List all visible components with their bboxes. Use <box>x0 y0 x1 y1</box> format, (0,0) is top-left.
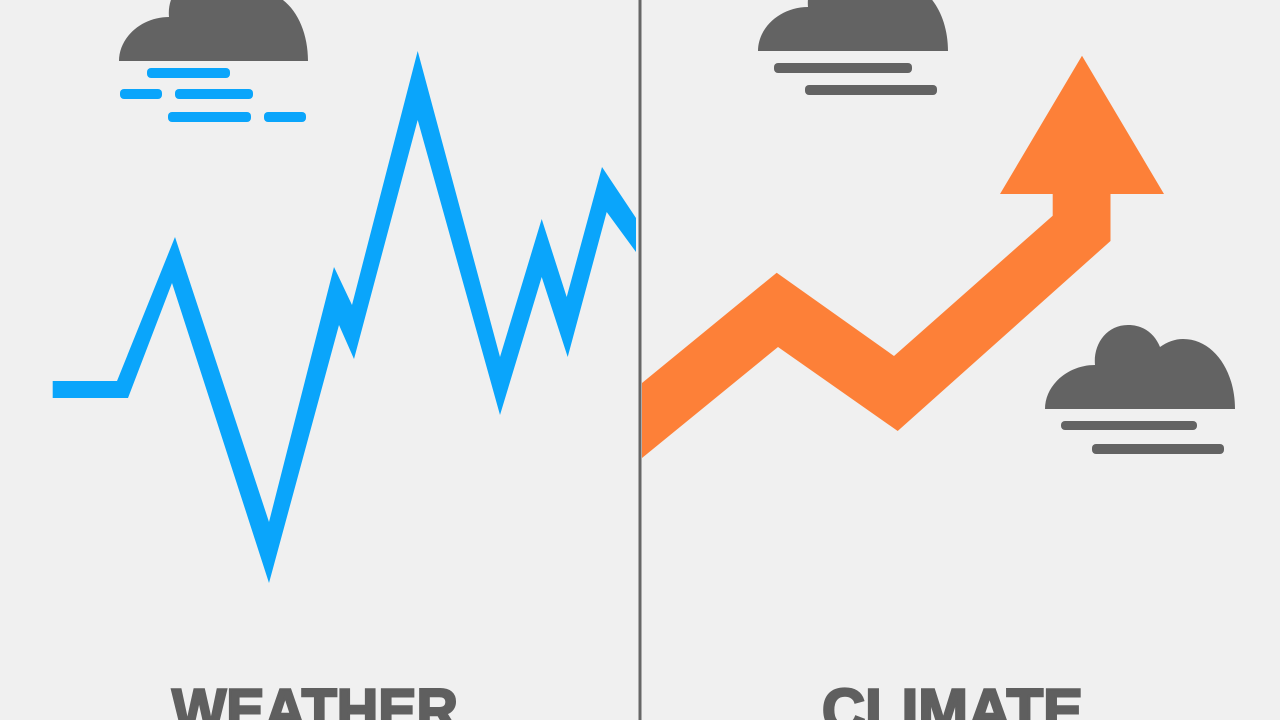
fog lines <box>774 63 937 95</box>
fog lines <box>120 68 306 122</box>
arrow: rising orange climate trend <box>642 56 1164 458</box>
cloud <box>119 0 308 61</box>
chart: jagged blue weather line <box>53 51 636 583</box>
icon: cloud with blue fog lines <box>119 0 308 122</box>
panel: climate <box>642 0 1235 720</box>
fog lines <box>1061 421 1224 454</box>
icon: cloud with grey fog lines, right <box>1045 325 1235 454</box>
center divider <box>638 0 642 720</box>
cloud <box>1045 325 1235 409</box>
cloud <box>758 0 948 51</box>
panel: weather <box>53 0 636 720</box>
icon: cloud with grey fog lines, top <box>758 0 948 95</box>
